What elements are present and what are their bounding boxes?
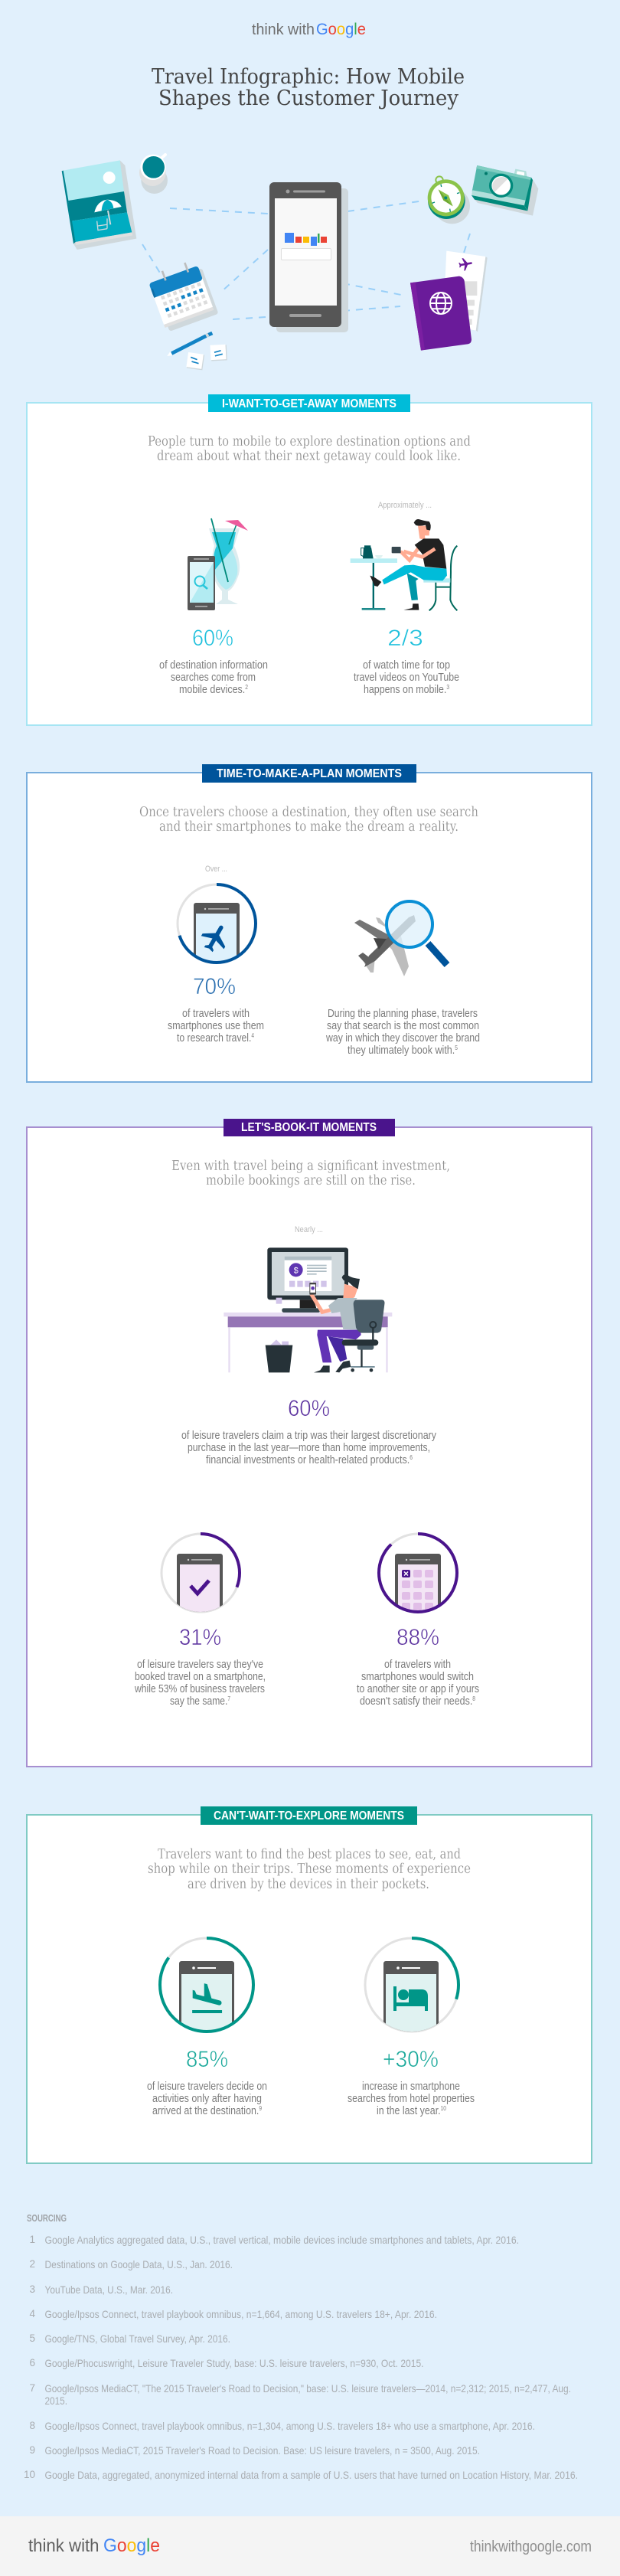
intro text: shop while on their trips. These moments of experience xyxy=(148,1862,471,1877)
footer logo: Google xyxy=(103,2535,160,2556)
stat: 70%: smartphones use them xyxy=(168,1019,264,1032)
footer url: thinkwithgoogle.com xyxy=(470,2538,592,2555)
icon: pencil and notes xyxy=(167,333,227,370)
header logo: think with Google: think with xyxy=(252,21,315,38)
icon: boarding pass xyxy=(443,251,488,332)
sourcing list: YouTube Data, U.S., Mar. 2016. xyxy=(44,2283,173,2296)
icon: ring gauge 88% with app grid xyxy=(379,1534,457,1619)
stat: 2/3: of watch time for top xyxy=(363,659,450,672)
stat: 2/3: happens on mobile. xyxy=(364,683,464,696)
intro text xyxy=(171,1159,450,1188)
footer logo: think with xyxy=(28,2535,100,2555)
stat: 60%: searches come from xyxy=(171,671,256,684)
stat: 70% xyxy=(168,974,264,1044)
sourcing list: Google/Phocuswright, Leisure Traveler Study, base: U.S. leisure travelers, n=930, Oct. 2015. xyxy=(44,2357,424,2369)
sourcing list xyxy=(24,2213,578,2481)
icon: ring gauge 70% with phone and plane xyxy=(178,884,256,972)
text: search discovery: 5 xyxy=(455,1044,458,1051)
sourcing list: 3 xyxy=(29,2283,35,2295)
title xyxy=(152,65,465,110)
sourcing list: 10 xyxy=(24,2469,35,2480)
sourcing list: 2015. xyxy=(44,2395,67,2407)
section label: LET'S-BOOK-IT MOMENTS xyxy=(241,1121,377,1134)
hero illustration xyxy=(62,155,538,370)
panel frame xyxy=(27,403,592,725)
sourcing list: Google/Ipsos Connect, travel playbook omnibus, n=1,664, among U.S. travelers 18+, Apr. 2016. xyxy=(44,2308,437,2320)
intro text xyxy=(139,805,478,835)
note: nearly: Nearly ... xyxy=(295,1225,323,1234)
stat: 31%: while 53% of business travelers xyxy=(134,1682,265,1695)
stat: 70%: of travelers with xyxy=(182,1007,250,1020)
intro text: People turn to mobile to explore destination options and xyxy=(148,434,471,449)
icon: plane under magnifier xyxy=(354,901,447,976)
stat: 60%: 2 xyxy=(245,684,248,691)
stat: 85%: activities only after having xyxy=(152,2092,262,2105)
icon: central smartphone with Google search xyxy=(269,182,348,332)
section label xyxy=(202,764,416,783)
icon: ring gauge 85% with landing plane xyxy=(160,1938,253,2038)
intro text xyxy=(148,434,471,464)
stat: 85% xyxy=(147,2047,267,2117)
sourcing list: 2 xyxy=(29,2258,35,2270)
sourcing list: 6 xyxy=(29,2357,35,2368)
sourcing list: SOURCING xyxy=(27,2213,67,2224)
icon: calendar xyxy=(146,258,218,332)
sourcing list: 5 xyxy=(29,2332,35,2344)
stat: +30%: searches from hotel properties xyxy=(348,2092,475,2105)
sourcing list: Google/TNS, Global Travel Survey, Apr. 2016. xyxy=(44,2332,230,2345)
stat: 85%: 9 xyxy=(259,2105,262,2112)
stat: +30%: in the last year. xyxy=(377,2104,454,2117)
footer logo xyxy=(28,2535,160,2556)
stat: 60% xyxy=(181,1396,436,1466)
icon: compass xyxy=(428,176,470,224)
stat: 2/3: travel videos on YouTube xyxy=(354,671,459,684)
note: over: Over ... xyxy=(205,865,227,874)
header logo: think with Google: Google xyxy=(316,21,366,38)
icon: ring gauge 31% with check xyxy=(162,1534,240,1619)
intro text: Even with travel being a significant investment, xyxy=(171,1159,450,1174)
sourcing list: Google/Ipsos MediaCT, 2015 Traveler's Road to Decision. Base: US leisure travelers, n = 3500, Aug. 2015. xyxy=(44,2444,480,2457)
section label: TIME-TO-MAKE-A-PLAN MOMENTS xyxy=(217,767,402,780)
intro text: Once travelers choose a destination, they often use search xyxy=(139,805,478,820)
panel frame xyxy=(27,1127,592,1767)
stat: 60%: 60% xyxy=(288,1396,330,1421)
text: search discovery xyxy=(325,1007,480,1057)
icon: man at desk with monitor and phone: $ xyxy=(294,1266,299,1275)
sourcing list: 4 xyxy=(29,2308,35,2319)
stat: +30%: increase in smartphone xyxy=(362,2080,460,2093)
intro text: and their smartphones to make the dream a reality. xyxy=(159,819,458,835)
stat: 2/3 xyxy=(354,626,459,696)
stat: 70%: 70% xyxy=(193,974,236,999)
stat: 88%: smartphones would switch xyxy=(361,1670,474,1683)
sourcing list: 8 xyxy=(29,2420,35,2431)
icon: cocktail and phone xyxy=(188,518,248,610)
stat: 31%: 7 xyxy=(227,1695,230,1702)
stat: +30%: +30% xyxy=(383,2047,439,2072)
sourcing list: 9 xyxy=(29,2444,35,2456)
intro text xyxy=(148,1847,471,1892)
icon: camera xyxy=(472,165,538,216)
sourcing list: Google Analytics aggregated data, U.S., travel vertical, mobile devices include smartphones and tablets, Apr. 2016. xyxy=(44,2234,519,2246)
panel: I-want-to-get-away moments xyxy=(27,394,592,725)
intro text: dream about what their next getaway could look like. xyxy=(157,449,461,464)
stat: 88%: 88% xyxy=(396,1625,439,1650)
stat: 85%: 85% xyxy=(186,2047,228,2072)
text: search discovery: say that search is the most common xyxy=(327,1019,479,1032)
panel frame xyxy=(27,1815,592,2163)
stat: 60%: 6 xyxy=(410,1454,413,1461)
stat: 60%: 60% xyxy=(192,626,233,651)
section label: I-WANT-TO-GET-AWAY MOMENTS xyxy=(222,397,396,410)
sourcing list: 1 xyxy=(29,2234,35,2245)
stat: 60%: mobile devices. xyxy=(179,683,258,696)
footer bar xyxy=(0,2516,620,2576)
stat: +30%: 10 xyxy=(441,2105,446,2112)
stat: 88%: 8 xyxy=(472,1695,475,1702)
stat: 60%: financial investments or health-related products. xyxy=(206,1453,450,1466)
sourcing list: Destinations on Google Data, U.S., Jan. 2016. xyxy=(44,2258,233,2270)
stat: 2/3: 2/3 xyxy=(387,626,423,651)
stat: 31%: say the same. xyxy=(170,1695,241,1708)
stat: 60%: of destination information xyxy=(159,659,268,672)
sourcing list: Google/Ipsos Connect, travel playbook omnibus, n=1,304, among U.S. travelers 18+ who use a smartphone, Apr. 2016. xyxy=(44,2420,535,2432)
stat: 60%: purchase in the last year—more than home improvements, xyxy=(188,1441,430,1454)
stat: 31%: 31% xyxy=(179,1625,221,1650)
stat: 88% xyxy=(357,1625,479,1708)
section label: CAN'T-WAIT-TO-EXPLORE MOMENTS xyxy=(214,1809,404,1822)
stat: 60% xyxy=(159,626,268,696)
panel: can't-wait-to-explore moments xyxy=(27,1806,592,2163)
dashed connectors xyxy=(142,201,470,319)
section label xyxy=(224,1119,395,1136)
stat: 31% xyxy=(134,1625,266,1708)
intro text: Travelers want to find the best places to see, eat, and xyxy=(158,1847,461,1862)
panel: let's-book-it moments xyxy=(27,1119,592,1767)
intro text: mobile bookings are still on the rise. xyxy=(206,1173,416,1188)
stat: 31%: of leisure travelers say they've xyxy=(137,1658,263,1671)
note: approximately: Approximately ... xyxy=(378,501,432,510)
icon: man at desk with monitor and phone xyxy=(224,1247,392,1372)
icon: passport xyxy=(410,276,472,351)
stat: 85%: arrived at the destination. xyxy=(152,2104,281,2117)
stat: +30% xyxy=(348,2047,475,2117)
icon: coffee cup xyxy=(139,155,168,194)
title: Travel Infographic: How Mobile xyxy=(152,65,465,89)
panel: time-to-make-a-plan moments xyxy=(27,764,592,1082)
stat: 60%: of leisure travelers claim a trip was their largest discretionary xyxy=(181,1429,436,1442)
section label xyxy=(208,394,410,412)
icon: ring gauge 30% with hotel bed xyxy=(365,1938,458,2038)
stat: 88%: of travelers with xyxy=(384,1658,451,1671)
header logo: think with Google xyxy=(252,21,366,38)
icon: travel book xyxy=(62,160,136,250)
panel frame xyxy=(27,773,592,1082)
text: search discovery: they ultimately book with. xyxy=(348,1044,476,1057)
stat: 85%: of leisure travelers decide on xyxy=(147,2080,267,2093)
stat: 88%: to another site or app if yours xyxy=(357,1682,479,1695)
section label xyxy=(201,1806,417,1825)
stat: 31%: booked travel on a smartphone, xyxy=(135,1670,266,1683)
text: search discovery: During the planning phase, travelers xyxy=(328,1007,478,1020)
stat: 70%: 4 xyxy=(251,1032,254,1039)
title: Shapes the Customer Journey xyxy=(158,87,459,110)
text: search discovery: way in which they discover the brand xyxy=(325,1031,480,1044)
intro text: are driven by the devices in their pockets. xyxy=(188,1877,429,1892)
stat: 88%: doesn't satisfy their needs. xyxy=(360,1695,495,1708)
icon: man at cafe table using phone xyxy=(351,519,457,610)
stat: 70%: to research travel. xyxy=(177,1031,269,1044)
sourcing list: 7 xyxy=(29,2382,35,2394)
stat: 2/3: 3 xyxy=(446,684,449,691)
